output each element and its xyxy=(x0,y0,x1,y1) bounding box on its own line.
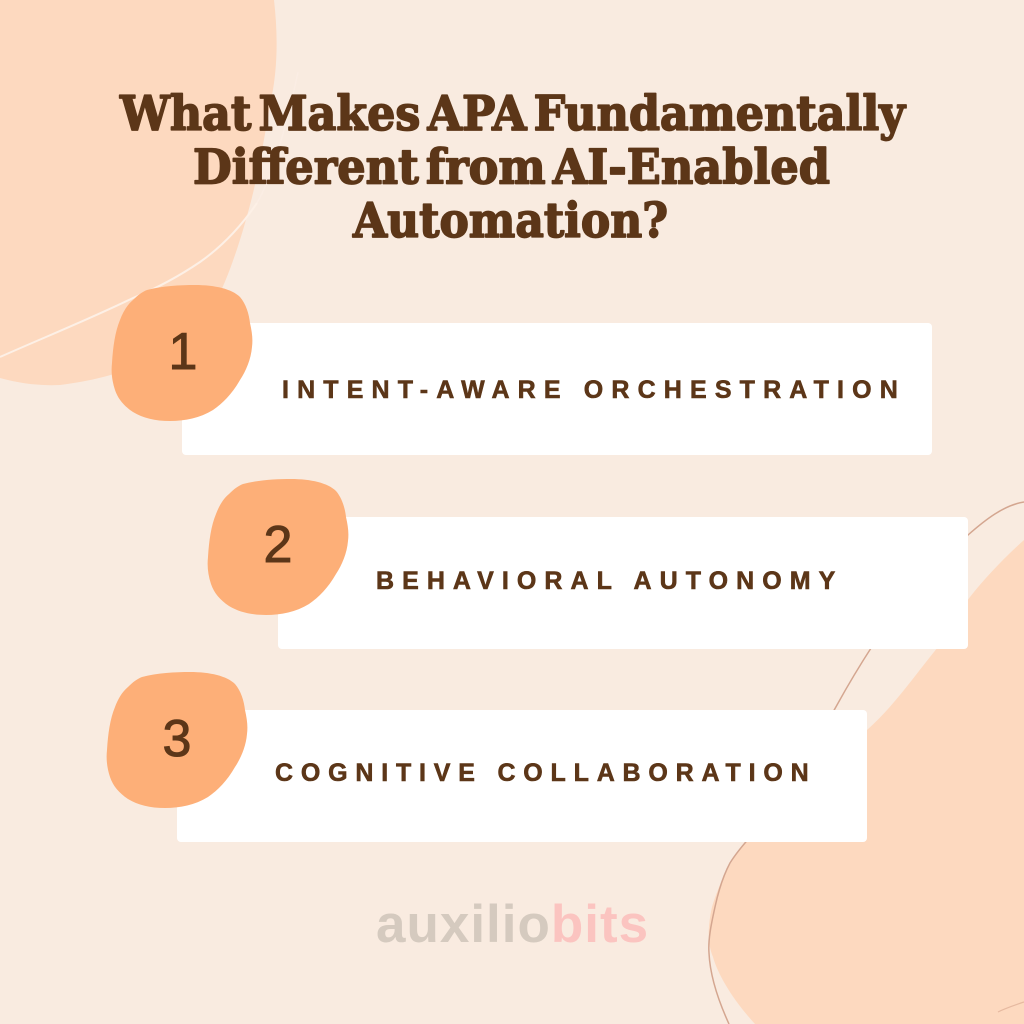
title xyxy=(118,86,907,249)
badge 1 xyxy=(112,285,252,421)
item 3: cognitive collaboration xyxy=(106,672,867,842)
badge 3: 3 xyxy=(163,710,191,768)
label 2: BEHAVIORAL AUTONOMY xyxy=(376,567,843,595)
badge 3 xyxy=(106,672,248,808)
label 3: COGNITIVE COLLABORATION xyxy=(275,759,816,787)
badge 1: 1 xyxy=(169,323,197,381)
card 3 xyxy=(177,710,867,842)
label 1: INTENT-AWARE ORCHESTRATION xyxy=(282,376,906,404)
logo: auxiliobits: auxiliobits xyxy=(376,895,649,954)
card 2 xyxy=(278,517,968,649)
item 1: intent-aware orchestration xyxy=(112,285,932,455)
item 2: behavioral autonomy xyxy=(208,479,968,649)
card 1 xyxy=(182,323,932,455)
title: What Makes APA Fundamentally xyxy=(119,86,907,142)
badge 2 xyxy=(208,479,348,615)
badge 2: 2 xyxy=(264,516,292,574)
title: Different from AI-Enabled xyxy=(193,140,830,196)
title: Automation? xyxy=(352,193,668,249)
